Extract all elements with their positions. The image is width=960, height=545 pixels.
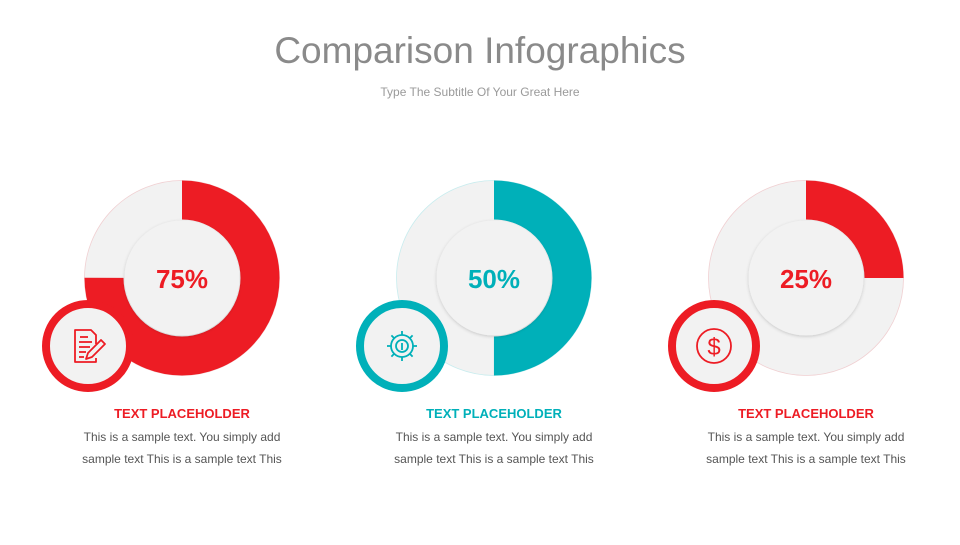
subtitle: Type The Subtitle Of Your Great Here [380,85,580,99]
panel: 50% [360,180,594,466]
donut chart 50%: 50% [468,264,520,294]
heading: TEXT PLACEHOLDER [426,406,562,421]
icon: gear with wrench [360,304,444,388]
icon: document with pen [46,304,130,388]
donut chart 25%: 25% [780,264,832,294]
donut chart 25% [708,180,904,376]
panel: 25%: sample text This is a sample text This [706,452,906,466]
icon: dollar coin: $ [707,334,721,361]
panel: 50%: sample text This is a sample text This [394,452,594,466]
body text: This is a sample text. You simply add [396,430,592,444]
icon: dollar coin [672,304,756,388]
panel: 75%: sample text This is a sample text This [82,452,282,466]
title: Comparison Infographics [274,30,686,71]
donut chart 75%: 75% [156,264,208,294]
body text: This is a sample text. You simply add [708,430,904,444]
panel: 75% [46,180,282,466]
donut chart 75% [84,180,280,376]
heading: TEXT PLACEHOLDER [114,406,250,421]
panel: 25% [672,180,906,466]
donut chart 50% [396,180,592,376]
body text: This is a sample text. You simply add [84,430,280,444]
heading: TEXT PLACEHOLDER [738,406,874,421]
